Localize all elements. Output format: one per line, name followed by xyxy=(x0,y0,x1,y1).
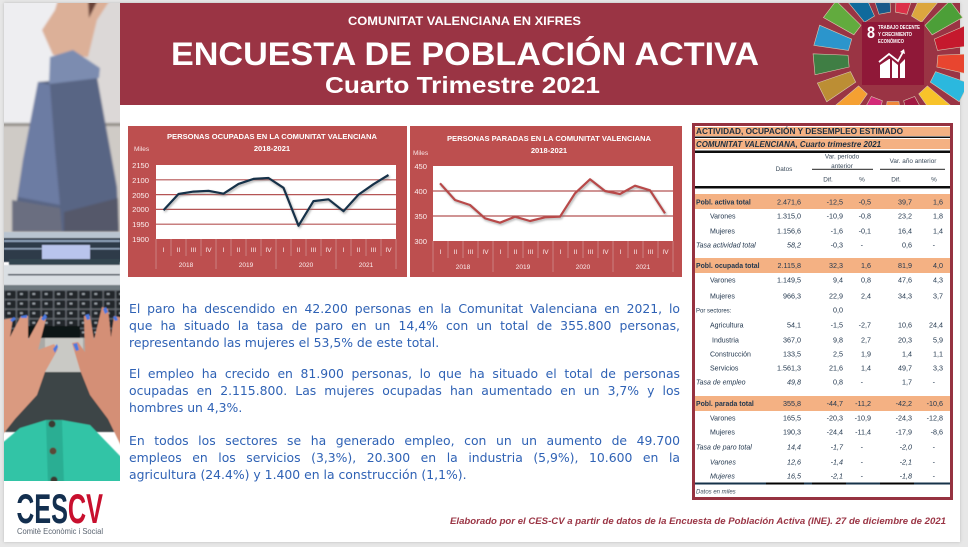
chart title: unemployed persons xyxy=(447,134,652,155)
x axis labels: 2020 xyxy=(299,262,314,269)
table column: period difference: 9,8 xyxy=(833,336,843,344)
table column: datos: 966,3 xyxy=(783,292,801,300)
x axis labels: I xyxy=(560,249,562,256)
table row labels: Servicios xyxy=(710,366,739,372)
x axis labels: II xyxy=(574,249,577,256)
table column: datos: 1.156,6 xyxy=(777,226,801,236)
table row labels: Por sectores: xyxy=(696,308,732,314)
table row labels: Pobl. ocupada total xyxy=(696,263,760,270)
table column: period percent: - xyxy=(861,240,864,250)
table column: datos: 133,5 xyxy=(783,350,801,358)
table column: period percent: -0,8 xyxy=(859,212,871,220)
table row labels: Tasa de empleo xyxy=(696,380,746,386)
table column: year percent: 1,6 xyxy=(933,198,943,206)
table column: period difference: 9,4 xyxy=(833,276,843,284)
table column headers: Dif. xyxy=(823,176,833,184)
y axis labels: 2150 xyxy=(132,161,149,170)
table column: period difference: -2,1 xyxy=(831,472,843,480)
table column: period percent: - xyxy=(861,442,864,452)
table column: year percent: 3,3 xyxy=(933,364,943,372)
x axis labels: II xyxy=(514,249,517,256)
text block: sectors paragraph: En todos los sectores se ha generado empleo, con un un aumento de 49.700 xyxy=(129,433,680,448)
y axis labels: 1900 xyxy=(132,235,149,244)
table column: period difference: 22,9 xyxy=(829,292,843,300)
table column: period difference: -24,4 xyxy=(827,428,843,436)
text block: unemployment paragraph: que ha situado la tasa de paro en un 14,4% con un total de 355.800 personas, xyxy=(129,318,680,333)
table column: period difference: 0,8 xyxy=(833,378,843,386)
table column: period percent: 1,6 xyxy=(861,261,871,270)
table column: period difference: -1,6 xyxy=(831,226,843,236)
x axis labels: II xyxy=(297,247,300,254)
table column: year difference: 20,3 xyxy=(898,336,912,344)
table column headers: Dif. xyxy=(891,176,901,184)
table column: period percent: -10,9 xyxy=(855,414,871,422)
y axis labels xyxy=(132,161,149,244)
table column: year difference: 39,7 xyxy=(898,198,912,206)
y axis labels xyxy=(414,162,427,246)
table column: datos: 2.115,8 xyxy=(778,261,801,270)
x axis labels: 2019 xyxy=(239,262,254,269)
x axis labels: I xyxy=(500,249,502,256)
table column headers: Datos xyxy=(776,166,792,173)
table band: employed population xyxy=(695,258,950,273)
table column: datos: 367,0 xyxy=(783,336,801,344)
x axis labels: I xyxy=(223,247,225,254)
table column: period percent: -0,5 xyxy=(859,198,871,206)
table row labels: Varones xyxy=(710,278,736,284)
table column: period difference: -20,3 xyxy=(827,414,843,422)
table column: year percent: -8,6 xyxy=(931,428,943,436)
panel: employed persons chart: Miles xyxy=(134,146,150,153)
table column: datos: 16,5 xyxy=(787,472,802,480)
table column: period difference: -1,7 xyxy=(831,442,844,452)
text block: employment paragraph xyxy=(129,366,680,415)
table column: year percent: 5,9 xyxy=(933,336,943,344)
panel: unemployed persons chart xyxy=(410,126,682,277)
table column headers: % xyxy=(859,176,865,184)
table column: year percent: -10,6 xyxy=(927,399,943,408)
table column: period difference: -1,4 xyxy=(831,458,843,466)
table column: year difference: 1,4 xyxy=(902,350,912,358)
table note: Datos en miles xyxy=(696,490,736,496)
table column: year percent: 24,4 xyxy=(929,320,943,330)
x axis labels: III xyxy=(468,249,473,256)
y axis labels: 350 xyxy=(414,212,427,221)
icon: SDG wheel with goal 8: ECONÓMICO xyxy=(878,37,904,45)
table column: year difference: -2,0 xyxy=(900,442,912,452)
x axis labels: 2021 xyxy=(359,262,374,269)
table column headers: anterior xyxy=(831,163,854,170)
x axis labels: III xyxy=(371,247,376,254)
x axis labels: III xyxy=(588,249,593,256)
table column: period difference: -1,5 xyxy=(831,320,843,330)
y axis labels: 1950 xyxy=(132,220,149,229)
logo: CESCV: Comitè Econòmic i Social xyxy=(17,526,103,536)
table column: year percent: 3,7 xyxy=(933,292,943,300)
table column: datos: 14,4 xyxy=(787,442,801,452)
table column: year percent xyxy=(927,198,943,480)
line: employed series xyxy=(164,175,388,226)
table row labels: Varones xyxy=(710,214,736,220)
table column: year percent: - xyxy=(933,442,936,452)
icon: SDG wheel with goal 8: TRABAJO DECENTE xyxy=(878,25,921,31)
table column: year percent: 1,1 xyxy=(933,350,943,358)
table column: year percent: - xyxy=(933,240,936,250)
x axis labels: IV xyxy=(602,249,609,256)
x axis labels xyxy=(440,249,669,271)
table heading: ACTIVIDAD, OCUPACIÓN Y DESEMPLEO ESTIMADO xyxy=(696,125,904,136)
chart title: employed persons: PERSONAS OCUPADAS EN LA COMUNITAT VALENCIANA xyxy=(167,132,378,141)
x axis labels: I xyxy=(283,247,285,254)
table row labels: Agricultura xyxy=(710,322,744,330)
x axis labels: 2019 xyxy=(516,264,531,271)
panel: activity table xyxy=(694,124,952,498)
table column: datos: 1.149,5 xyxy=(777,276,801,284)
table column: period difference: 21,6 xyxy=(829,364,843,372)
table row labels: Pobl. parada total xyxy=(696,401,754,408)
table row labels: Mujeres xyxy=(710,474,735,480)
table column: period percent: - xyxy=(861,472,864,480)
x axis labels: II xyxy=(177,247,180,254)
table column: period difference: 0,0 xyxy=(833,306,843,314)
table row labels: Varones xyxy=(710,460,736,466)
x axis labels: IV xyxy=(265,247,272,254)
x axis labels xyxy=(163,247,392,269)
y axis labels: 300 xyxy=(414,237,427,246)
chart title: unemployed persons: PERSONAS PARADAS EN LA COMUNITAT VALENCIANA xyxy=(447,134,652,143)
table column: period percent: 2,7 xyxy=(861,336,871,344)
table column: year difference: -1,8 xyxy=(900,472,912,480)
table column: period percent: 1,4 xyxy=(861,364,871,372)
line: unemployed series xyxy=(440,179,665,223)
table column: year difference: 34,3 xyxy=(898,292,912,300)
table row labels: Mujeres xyxy=(710,228,735,236)
table column: datos: 12,6 xyxy=(787,458,801,466)
x axis labels: III xyxy=(311,247,316,254)
table column: year difference xyxy=(896,198,912,480)
table column: period difference: -10,9 xyxy=(827,212,843,220)
table row labels: Mujeres xyxy=(710,430,735,436)
table row labels: Pobl. activa total xyxy=(696,200,751,206)
panel: unemployed persons chart: Miles xyxy=(413,150,429,157)
y axis labels: 400 xyxy=(414,187,427,196)
table row labels: Mujeres xyxy=(710,294,735,300)
table column: period percent: - xyxy=(861,378,864,386)
table column: period difference: 32,3 xyxy=(829,261,843,270)
table column: datos: 2.471,6 xyxy=(777,198,801,206)
photo: person typing on a laptop xyxy=(0,0,124,485)
text block: unemployment paragraph: representando las mujeres el 53,5% de este total. xyxy=(129,335,439,350)
header supertitle: COMUNITAT VALENCIANA EN XIFRES xyxy=(348,14,581,28)
text block: sectors paragraph xyxy=(129,433,680,482)
y axis labels: 2100 xyxy=(132,176,149,185)
table column: period difference: 2,5 xyxy=(833,350,843,358)
table row labels: Tasa de paro total xyxy=(696,444,752,452)
table column: period percent: - xyxy=(861,458,864,466)
x axis labels: II xyxy=(237,247,240,254)
table column: period percent: 2,4 xyxy=(861,292,871,300)
x axis labels: IV xyxy=(385,247,392,254)
table column: year difference: -24,3 xyxy=(896,414,912,422)
text block: sectors paragraph: empleos en los servicios (3,3%), 20.300 en la industria (5,9%), 10.600 en la xyxy=(129,450,680,465)
main title: ENCUESTA DE POBLACIÓN ACTIVA xyxy=(171,36,759,72)
header banner xyxy=(120,3,960,105)
table column: year difference: 23,2 xyxy=(898,212,912,220)
chart title: employed persons xyxy=(167,132,378,153)
table column: period percent: -2,7 xyxy=(859,320,871,330)
table column: datos: 54,1 xyxy=(787,320,801,330)
table row labels: Varones xyxy=(710,416,736,422)
table row labels: Industria xyxy=(712,338,739,344)
table column: year difference: 81,9 xyxy=(898,261,912,270)
footer source note: Elaborado por el CES-CV a partir de datos de la Encuesta de Población Activa (INE). 27 de diciembre de 2021 xyxy=(450,516,946,527)
x axis labels: III xyxy=(528,249,533,256)
table column: year difference: 49,7 xyxy=(898,364,912,372)
icon: SDG wheel with goal 8: Y CRECIMIENTO xyxy=(878,32,912,38)
icon: SDG wheel with goal 8: 8 xyxy=(867,23,875,42)
table column: datos xyxy=(777,198,802,480)
x axis labels: I xyxy=(620,249,622,256)
table column: datos: 58,2 xyxy=(787,240,801,250)
table column: period difference: -44,7 xyxy=(827,399,843,408)
text block: employment paragraph: ocupadas en 2.115.800. Las mujeres ocupadas han aumentado en un 3,7% y los xyxy=(129,383,680,398)
table row labels xyxy=(696,200,760,480)
table column: period difference: -12,5 xyxy=(827,198,843,206)
table column: year percent: - xyxy=(933,472,936,480)
x axis labels: II xyxy=(454,249,457,256)
table column: period percent xyxy=(855,198,871,480)
table column: datos: 190,3 xyxy=(783,428,801,436)
x axis labels: 2021 xyxy=(636,264,651,271)
x axis labels: IV xyxy=(205,247,212,254)
table column: year difference: 1,7 xyxy=(902,378,912,386)
table column: year difference: -17,9 xyxy=(896,428,912,436)
table column headers xyxy=(695,154,950,188)
table row labels: Construcción xyxy=(710,352,751,358)
table column: period percent: -11,4 xyxy=(855,428,871,436)
x axis labels: IV xyxy=(542,249,549,256)
table column: datos: 355,8 xyxy=(783,399,801,408)
text block: employment paragraph: El empleo ha crecido en 81.900 personas, lo que ha situado el total de personas xyxy=(129,366,680,381)
table column: year difference: 47,6 xyxy=(898,276,912,284)
text block: employment paragraph: hombres un 4,3%. xyxy=(129,400,242,415)
table band: unemployed population xyxy=(695,396,950,411)
x axis labels: II xyxy=(634,249,637,256)
x axis labels: III xyxy=(251,247,256,254)
table column: datos: 49,8 xyxy=(787,378,801,386)
table heading: COMUNITAT VALENCIANA, Cuarto trimestre 2021 xyxy=(696,140,881,149)
table column: datos: 1.561,3 xyxy=(777,364,801,372)
table column headers: Var. año anterior xyxy=(890,158,937,165)
x axis labels: I xyxy=(343,247,345,254)
y axis labels: 2000 xyxy=(132,205,149,214)
x axis labels: 2018 xyxy=(456,264,471,271)
table column: year difference: 0,6 xyxy=(902,240,912,250)
y axis labels: 2050 xyxy=(132,191,149,200)
icon: SDG wheel with goal 8 xyxy=(812,3,964,105)
logo: CESCV: CESCV xyxy=(16,485,103,532)
x axis labels: IV xyxy=(482,249,489,256)
x axis labels: II xyxy=(357,247,360,254)
table column: year percent: - xyxy=(933,378,936,386)
table column: year percent: 1,8 xyxy=(933,212,943,220)
table column: year percent: 4,0 xyxy=(933,261,943,270)
x axis labels: IV xyxy=(662,249,669,256)
chart title: unemployed persons: 2018-2021 xyxy=(531,146,568,155)
table band: active population xyxy=(695,194,950,209)
table column: year percent: 4,3 xyxy=(933,276,943,284)
table column: year difference: 16,4 xyxy=(898,226,912,236)
text block: unemployment paragraph: El paro ha descendido en 42.200 personas en la Comunitat Valenciana en 2021, lo xyxy=(129,301,680,316)
table column headers: Var. período xyxy=(825,154,860,160)
table row labels: Tasa actividad total xyxy=(696,242,756,250)
chart title: employed persons: 2018-2021 xyxy=(254,144,291,153)
table column: datos: 165,5 xyxy=(783,414,801,422)
text block: unemployment paragraph xyxy=(129,301,680,350)
table column: period difference xyxy=(827,198,844,480)
subtitle: Cuarto Trimestre 2021 xyxy=(325,72,600,98)
table column: year percent: -12,8 xyxy=(927,414,943,422)
table column: year percent: - xyxy=(933,458,936,466)
table column: year difference: -42,2 xyxy=(896,399,912,408)
table column: datos: 1.315,0 xyxy=(777,212,801,220)
y axis labels: 450 xyxy=(414,162,427,171)
table column: period percent: -0,1 xyxy=(859,226,871,236)
text block: sectors paragraph: agricultura (24.4%) y 1.400 en la construcción (1,1%). xyxy=(129,467,467,482)
table column: period difference: -0,3 xyxy=(831,240,843,250)
x axis labels: IV xyxy=(325,247,332,254)
panel: employed persons chart xyxy=(128,126,407,277)
x axis labels: 2018 xyxy=(179,262,194,269)
table heading xyxy=(695,125,950,153)
x axis labels: III xyxy=(648,249,653,256)
x axis labels: I xyxy=(163,247,165,254)
x axis labels: 2020 xyxy=(576,264,591,271)
table column: year difference: 10,6 xyxy=(898,320,912,330)
table column: year difference: -2,1 xyxy=(900,458,912,466)
table column: year percent: 1,4 xyxy=(933,226,943,236)
table column headers: % xyxy=(931,176,937,184)
x axis labels: I xyxy=(440,249,442,256)
table column: period percent: 1,9 xyxy=(861,350,871,358)
table column: period percent: 0,8 xyxy=(861,276,871,284)
x axis labels: III xyxy=(191,247,196,254)
table column: period percent: -11,2 xyxy=(855,399,871,408)
